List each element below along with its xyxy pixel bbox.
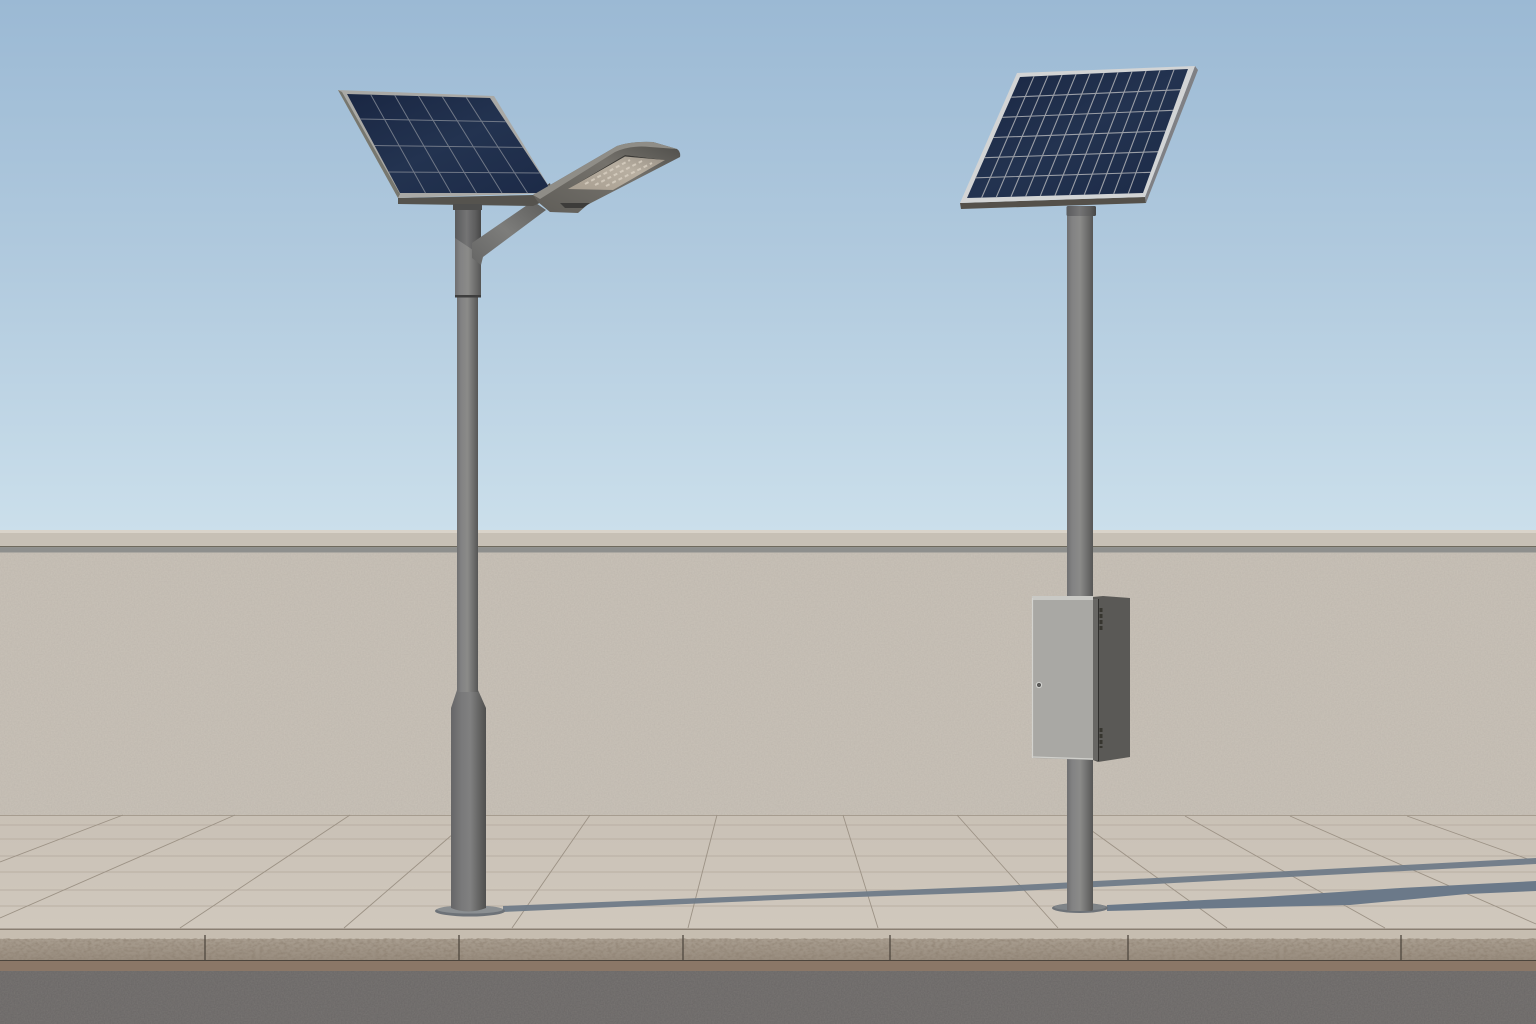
enclosure side — [1093, 596, 1130, 762]
lamp head — [533, 142, 680, 213]
curb — [0, 930, 1536, 962]
left street light — [338, 90, 680, 916]
left lower sleeve — [451, 690, 486, 912]
enclosure lock — [1036, 682, 1042, 688]
pavement with tile joints — [0, 815, 1536, 930]
cast shadow of left pole and arm — [503, 858, 1536, 912]
right solar panel — [960, 66, 1198, 209]
lamp LED glass — [568, 155, 665, 190]
sky background — [0, 0, 1536, 531]
lamp arm — [472, 201, 546, 265]
cast shadow of right pole and panel — [1107, 881, 1536, 911]
left panel mount — [453, 204, 482, 210]
gutter strip — [0, 961, 1536, 971]
right base plate — [1052, 903, 1108, 913]
right solar pole — [960, 66, 1198, 913]
right pole shaft — [1067, 214, 1093, 911]
left solar panel — [338, 90, 553, 206]
battery enclosure — [1032, 596, 1130, 762]
lamp sensor block — [560, 203, 590, 208]
right panel mount — [1066, 206, 1096, 216]
left base plate — [435, 906, 505, 916]
road asphalt — [0, 971, 1536, 1024]
concrete wall — [0, 530, 1536, 816]
enclosure hinges — [1100, 608, 1102, 748]
enclosure front door — [1032, 598, 1093, 760]
left pole joint — [455, 205, 481, 298]
left pole shaft — [457, 297, 478, 692]
